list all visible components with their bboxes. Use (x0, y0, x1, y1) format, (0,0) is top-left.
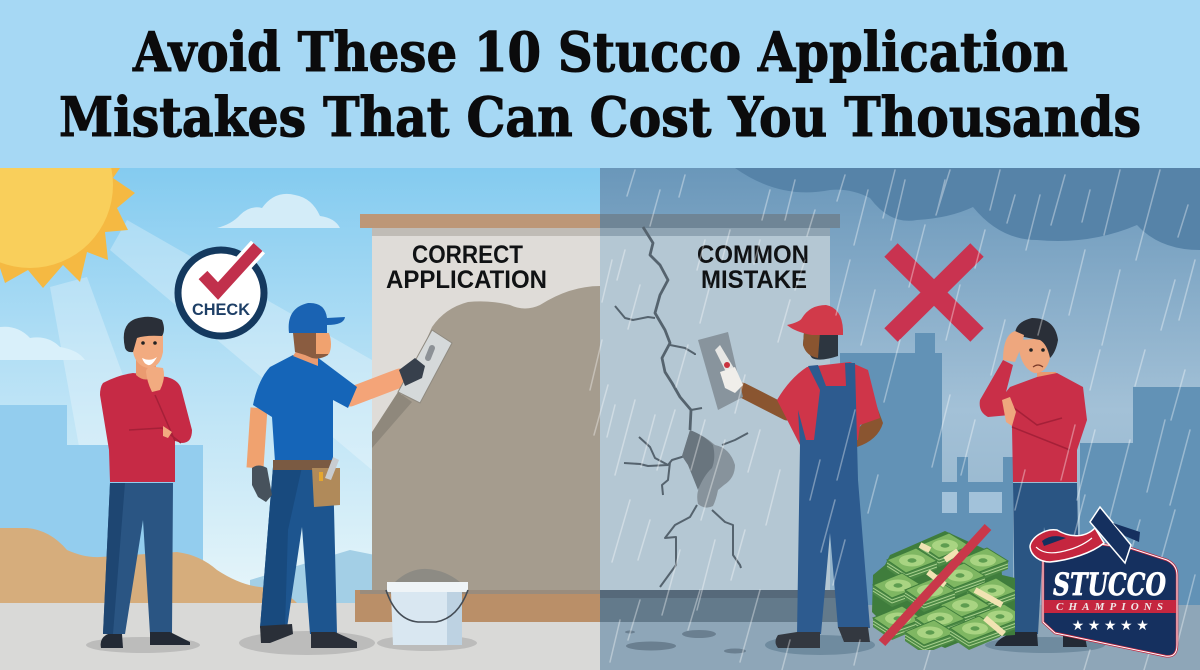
logo stripe (1044, 600, 1176, 613)
wall: mistake side (600, 214, 840, 622)
label: common mistake: MISTAKE (701, 266, 807, 294)
icon: red X (891, 250, 977, 335)
wall: correct side (355, 214, 600, 622)
icon: sun rays (50, 220, 372, 470)
person: smiling homeowner (86, 317, 200, 653)
cloud left upper (217, 194, 340, 228)
label: correct application: CORRECT (412, 241, 523, 269)
stucco shadow (372, 392, 412, 448)
label: correct application: APPLICATION (386, 266, 547, 294)
logo: Stucco Champions badge: CHAMPIONS (1056, 601, 1163, 613)
wall base (355, 590, 600, 622)
cloud left lower (0, 327, 85, 360)
ground (0, 603, 600, 670)
person: worker making a mistake (742, 305, 883, 655)
label: common mistake: COMMON (697, 241, 809, 269)
sand hill (0, 528, 297, 603)
panel: stormy mistake side background (600, 168, 1200, 670)
icon: steel trowel, correct side (398, 330, 452, 403)
city windows (942, 492, 1002, 513)
icon: wall cracks (615, 227, 748, 587)
background buildings (0, 405, 203, 560)
icon: slash through money (882, 527, 988, 643)
red swoosh (1030, 528, 1104, 562)
distant blue hill (250, 550, 375, 605)
panel: sunny correct side background (0, 168, 600, 670)
bucket of stucco (377, 569, 477, 651)
crack hole (682, 430, 735, 508)
label: common mistake (697, 241, 809, 294)
icon: sun (0, 168, 135, 288)
person: worried homeowner (980, 318, 1105, 653)
header band (0, 0, 1200, 168)
person: worker applying stucco (239, 303, 400, 655)
city silhouette (840, 333, 1200, 606)
logo: Stucco Champions badge: ★★★★★ (1072, 618, 1152, 634)
logo: Stucco Champions badge (1030, 507, 1177, 656)
title (59, 20, 1141, 149)
icon: steel trowel, mistake side (698, 332, 743, 410)
money pile (872, 531, 1025, 654)
puddles (625, 630, 746, 654)
stucco coat (372, 286, 600, 592)
icon: check badge: CHECK (192, 300, 251, 319)
wet ground (600, 605, 1200, 670)
storm cloud (735, 168, 1200, 250)
title: Avoid These 10 Stucco Application (132, 20, 1068, 84)
label: correct application (386, 241, 547, 294)
rain (590, 170, 1195, 670)
logo trowel (1090, 507, 1131, 563)
icon: check badge (178, 247, 264, 336)
logo: Stucco Champions badge: STUCCO (1053, 567, 1166, 603)
